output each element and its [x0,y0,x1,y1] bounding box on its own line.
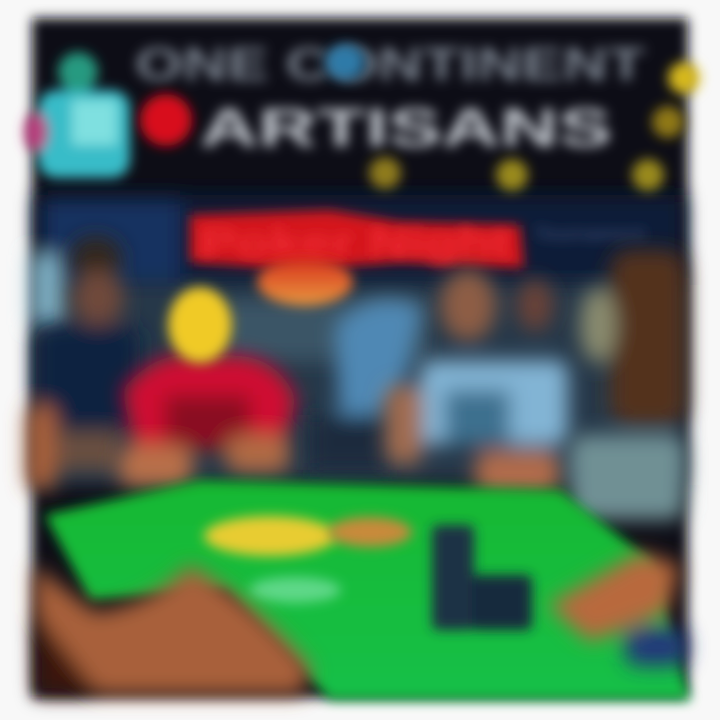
table card [249,577,341,603]
banner glow [257,258,353,306]
person: centre, blue shirt [310,300,422,470]
table chips orange [328,517,412,547]
table chips [204,516,336,556]
foreground arm right [548,552,687,666]
green table [45,480,690,700]
person: middle, red shirt [118,287,296,487]
banner caption: Tournament [535,224,645,244]
title line 1: ONE CONTINENT [135,38,645,90]
dark object [432,525,532,630]
icon: yellow coins [369,62,700,191]
yellow head [168,287,232,363]
title [135,38,645,158]
person: far right, long hair [570,250,686,520]
scene background [30,195,684,485]
red banner [190,210,645,306]
icon: teal badge [24,44,365,178]
person: right, light blue shirt [385,269,568,495]
person: left, navy shirt [26,236,140,490]
title line 2: ARTISANS [200,98,612,158]
banner text: Poker Night [200,221,510,265]
icon: red circle [140,94,192,146]
foreground arm left [34,565,312,695]
